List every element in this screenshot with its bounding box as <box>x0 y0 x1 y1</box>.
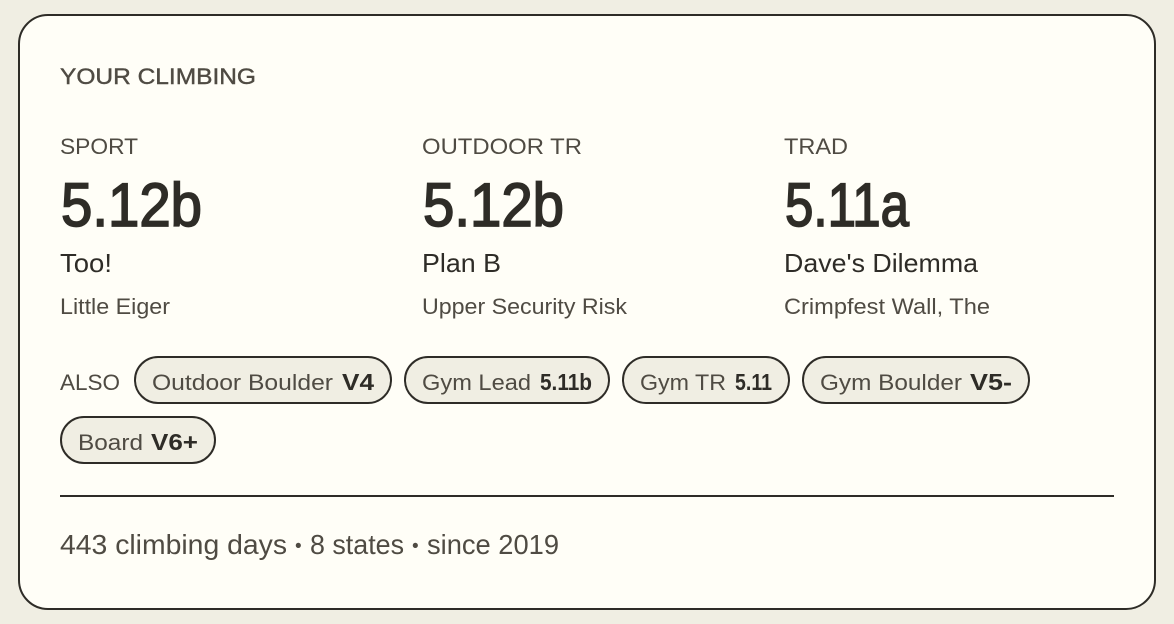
column: outdoor top rope: Upper Security Risk <box>422 294 628 319</box>
column: trad <box>784 134 990 319</box>
column: outdoor top rope: Plan B <box>422 248 501 278</box>
pill: outdoor boulder: V4 <box>342 369 374 395</box>
footer stats: • <box>412 536 419 557</box>
column: trad: TRAD <box>784 134 848 159</box>
column: trad: Crimpfest Wall, The <box>784 294 990 319</box>
pill: board: Board <box>78 430 143 455</box>
pill: gym boulder: Gym Boulder <box>820 370 962 395</box>
pill: gym boulder <box>803 357 1029 403</box>
pill: outdoor boulder: Outdoor Boulder <box>152 370 333 395</box>
pill: board: V6+ <box>151 429 198 455</box>
pill: gym tr: Gym TR <box>640 370 726 395</box>
column: sport <box>60 134 202 319</box>
pill: board <box>61 417 215 463</box>
pill: gym boulder: V5- <box>970 369 1012 395</box>
pill: gym lead: Gym Lead <box>422 370 531 395</box>
pill: gym tr: 5.11 <box>735 369 772 395</box>
heading: your climbing: YOUR CLIMBING <box>60 64 256 89</box>
footer stats: 443 climbing days <box>60 529 287 560</box>
footer stats: 8 states <box>310 529 404 560</box>
footer stats <box>60 529 559 560</box>
column: sport: SPORT <box>60 134 138 159</box>
pill: outdoor boulder <box>135 357 391 403</box>
column: sport: Too! <box>60 248 112 278</box>
column: trad: 5.11a <box>785 171 909 239</box>
footer stats: • <box>295 536 302 557</box>
column: sport: Little Eiger <box>60 294 170 319</box>
column: trad: Dave's Dilemma <box>784 248 979 278</box>
footer stats: since 2019 <box>427 529 559 560</box>
column: outdoor top rope <box>422 134 628 319</box>
label: also: ALSO <box>60 370 120 395</box>
pill: gym lead: 5.11b <box>540 369 592 395</box>
pill: gym tr <box>623 357 789 403</box>
column: outdoor top rope: 5.12b <box>423 171 564 239</box>
column: outdoor top rope: OUTDOOR TR <box>422 134 582 159</box>
pill: gym lead <box>405 357 609 403</box>
column: sport: 5.12b <box>61 171 202 239</box>
